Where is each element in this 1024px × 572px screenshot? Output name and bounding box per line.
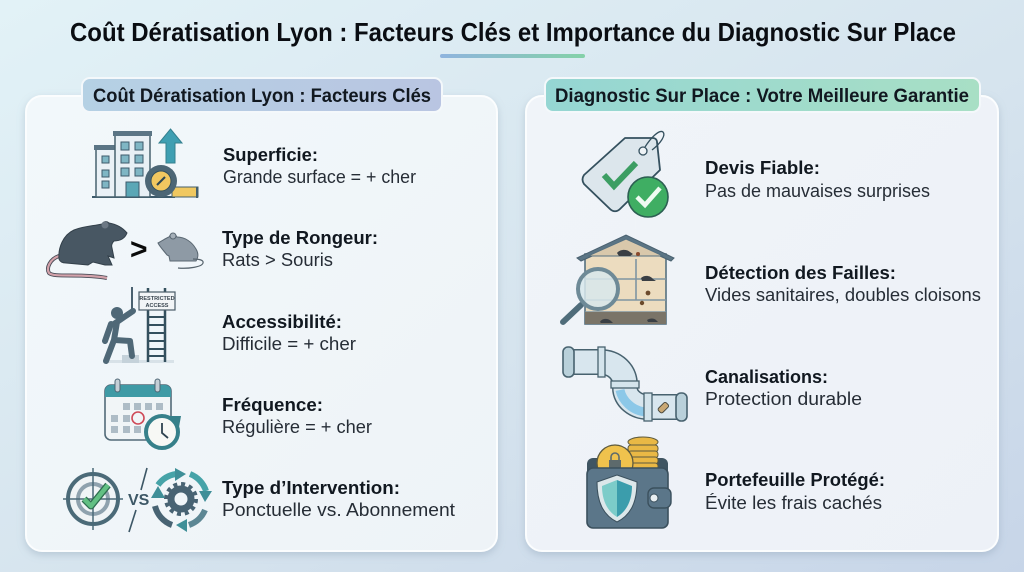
text: détection des failles: Détection des Failles:: [705, 262, 896, 283]
icon: price tag with check: [582, 131, 668, 217]
title underline: [440, 54, 585, 58]
icon: person climbing restricted ladder: ACCESS: [146, 303, 169, 309]
panel heading: facteurs clés: Coût Dératisation Lyon : Facteurs Clés: [93, 85, 431, 107]
text: canalisations: Protection durable: [705, 388, 862, 409]
panel heading: diagnostic: Diagnostic Sur Place : Votre Meilleure Garantie: [555, 85, 969, 107]
title: Coût Dératisation Lyon : Facteurs Clés et Importance du Diagnostic Sur Place: [70, 17, 956, 47]
icon: rat greater than mouse: >: [130, 233, 148, 266]
text: superficie: [223, 144, 416, 187]
text: type d'intervention: Ponctuelle vs. Abonnement: [222, 499, 456, 520]
icon: person climbing restricted ladder: RESTRICTED: [139, 296, 175, 302]
text: devis fiable: [705, 157, 930, 201]
text: devis fiable: Devis Fiable:: [705, 157, 820, 178]
icon: rat greater than mouse: [48, 222, 203, 278]
text: accessibilité: Difficile = + cher: [222, 333, 356, 354]
panel: diagnostic sur place: [526, 78, 998, 551]
text: canalisations: Canalisations:: [705, 366, 828, 387]
text: type de rongeur: [222, 227, 378, 270]
text: type de rongeur: Type de Rongeur:: [222, 227, 378, 248]
text: type d'intervention: [222, 477, 456, 520]
text: portefeuille protégé: Évite les frais cachés: [705, 492, 882, 513]
text: détection des failles: Vides sanitaires, doubles cloisons: [705, 284, 981, 305]
text: superficie: Superficie:: [223, 144, 318, 165]
text: accessibilité: Accessibilité:: [222, 311, 342, 332]
icon: target vs cycle: VS: [128, 492, 150, 509]
text: fréquence: [222, 394, 372, 437]
panel heading: diagnostic: [545, 78, 980, 112]
text: fréquence: Régulière = + cher: [222, 416, 372, 437]
icon: building and tape measure: [92, 129, 198, 198]
text: type d'intervention: Type d’Intervention:: [222, 477, 400, 498]
panel: facteurs clés: [26, 78, 497, 551]
icon: house cross-section and magnifier: [563, 235, 674, 324]
text: canalisations: [705, 366, 862, 409]
text: portefeuille protégé: Portefeuille Protégé:: [705, 469, 885, 490]
text: devis fiable: Pas de mauvaises surprises: [705, 180, 930, 201]
icon: person climbing restricted ladder: [104, 287, 175, 363]
icon: wallet with shield and coins: [587, 437, 671, 528]
text: détection des failles: [705, 262, 981, 305]
icon: pipe with patch: [563, 347, 687, 421]
text: portefeuille protégé: [705, 469, 885, 513]
text: type de rongeur: Rats > Souris: [222, 249, 333, 270]
icon: calendar and clock: [105, 379, 181, 448]
text: fréquence: Fréquence:: [222, 394, 323, 415]
panel heading: facteurs clés: [82, 78, 442, 112]
text: superficie: Grande surface = + cher: [223, 166, 416, 187]
text: accessibilité: [222, 311, 356, 354]
icon: target vs cycle: [63, 468, 212, 532]
